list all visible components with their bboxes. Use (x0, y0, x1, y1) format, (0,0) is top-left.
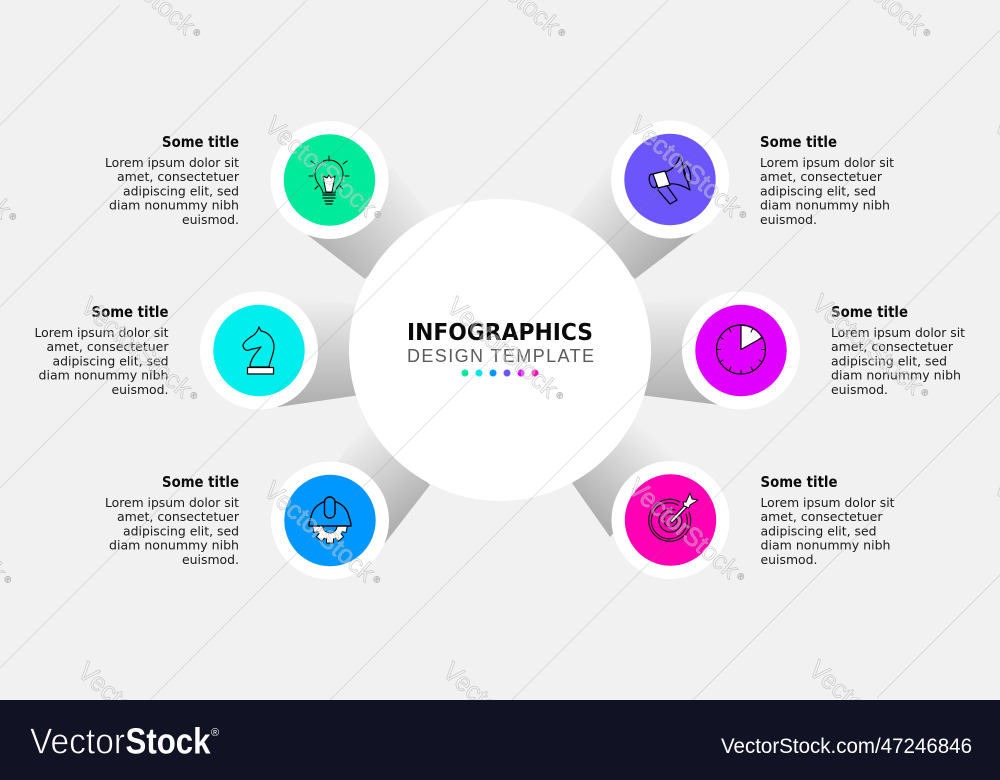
footer image id: VectorStock.com/47246846 (721, 735, 972, 758)
text: middle left: diam nonummy nibh (38, 368, 168, 382)
text: top right: adipiscing elit, sed (760, 184, 876, 198)
text: top right: amet, consectetuer (760, 170, 883, 184)
text: middle left: adipiscing elit, sed (52, 354, 168, 368)
text: bottom right: Some title (760, 473, 838, 491)
text: bottom left: Some title (162, 473, 239, 491)
watermarks: VectorStock (806, 288, 930, 401)
watermarks: ® (188, 390, 200, 402)
text: bottom left (105, 473, 240, 567)
text: middle right: adipiscing elit, sed (831, 354, 947, 368)
watermarks: ® (735, 571, 747, 583)
text: top right (760, 133, 894, 227)
watermarks: ® (2, 574, 14, 586)
icon: helmet and gear (309, 497, 351, 543)
text: top right: diam nonummy nibh (760, 198, 890, 212)
text: top left: Some title (162, 133, 239, 151)
watermarks: ® (191, 27, 203, 39)
text: middle left: Some title (92, 303, 168, 321)
text: top left: amet, consectetuer (117, 170, 240, 184)
watermarks: ® (7, 211, 19, 223)
subheading: DESIGN TEMPLATE (407, 346, 594, 366)
text: bottom right: diam nonummy nibh (760, 538, 890, 552)
watermarks: ® (554, 390, 566, 402)
text: top left: diam nonummy nibh (109, 198, 239, 212)
footer logo (30, 720, 219, 762)
central circle (349, 199, 651, 501)
text: bottom right: adipiscing elit, sed (760, 524, 876, 538)
heading: INFOGRAPHICS (407, 318, 593, 346)
watermarks: ® (556, 27, 568, 39)
watermarks: VectorStock (624, 110, 748, 223)
footer logo: Stock (126, 720, 211, 762)
text: top right: Lorem ipsum dolor sit (760, 156, 894, 170)
text: middle right: Some title (831, 303, 908, 321)
text: bottom right: euismod. (760, 553, 818, 567)
watermarks: VectorStock (72, 656, 196, 769)
watermarks: ® (921, 27, 933, 39)
footer bar (0, 700, 1000, 780)
icon: chess knight (243, 327, 274, 374)
text: bottom right (760, 473, 895, 567)
node: middle left, chess knight (200, 292, 318, 410)
footer logo: Vector (30, 720, 125, 762)
node: top right, megaphone (611, 120, 729, 238)
watermarks: ® (371, 574, 383, 586)
icon: clock (716, 325, 766, 374)
text: middle right: diam nonummy nibh (831, 368, 961, 382)
watermarks: VectorStock (622, 472, 746, 585)
watermarks: VectorStock (803, 654, 927, 767)
node: bottom left, helmet and gear (271, 462, 389, 580)
text: bottom right: Lorem ipsum dolor sit (760, 496, 895, 510)
icon: light bulb (309, 156, 349, 204)
text: bottom left: adipiscing elit, sed (123, 524, 239, 538)
watermarks: VectorStock (258, 475, 382, 588)
text: bottom left: Lorem ipsum dolor sit (105, 496, 239, 510)
text: bottom right: amet, consectetuer (760, 510, 884, 524)
text: top left: euismod. (182, 213, 239, 227)
colour dots (462, 370, 538, 376)
text: bottom left: euismod. (182, 553, 239, 567)
shadows behind the circles (278, 160, 720, 543)
watermarks: VectorStock (259, 110, 383, 223)
text: bottom left: amet, consectetuer (117, 510, 240, 524)
text: top left: Lorem ipsum dolor sit (105, 156, 239, 170)
text: top left (105, 133, 240, 227)
node: top left, light bulb (270, 121, 388, 239)
watermarks: ® (372, 209, 384, 221)
watermarks: ® (919, 387, 931, 399)
text: middle right (831, 303, 965, 397)
text: bottom left: diam nonummy nibh (109, 538, 239, 552)
watermarks: VectorStock (441, 291, 565, 404)
icon: target and arrow (649, 493, 698, 541)
text: top right: euismod. (760, 213, 817, 227)
text: top left: adipiscing elit, sed (123, 184, 239, 198)
node: bottom right, target and arrow (612, 461, 730, 579)
text: middle right: Lorem ipsum dolor sit (831, 326, 965, 340)
footer logo: ® (211, 727, 219, 739)
watermarks: VectorStock (75, 291, 199, 404)
watermarks: VectorStock (437, 656, 561, 769)
text: middle left: Lorem ipsum dolor sit (34, 326, 169, 340)
text: middle left (34, 303, 170, 397)
watermarks: ® (737, 209, 749, 221)
text: middle right: amet, consectetuer (831, 340, 954, 354)
node: middle right, clock (682, 292, 800, 410)
text: middle left: euismod. (112, 383, 168, 397)
text: middle left: amet, consectetuer (46, 340, 170, 354)
text: top right: Some title (760, 133, 837, 151)
text: middle right: euismod. (831, 383, 888, 397)
icon: megaphone (648, 156, 692, 204)
